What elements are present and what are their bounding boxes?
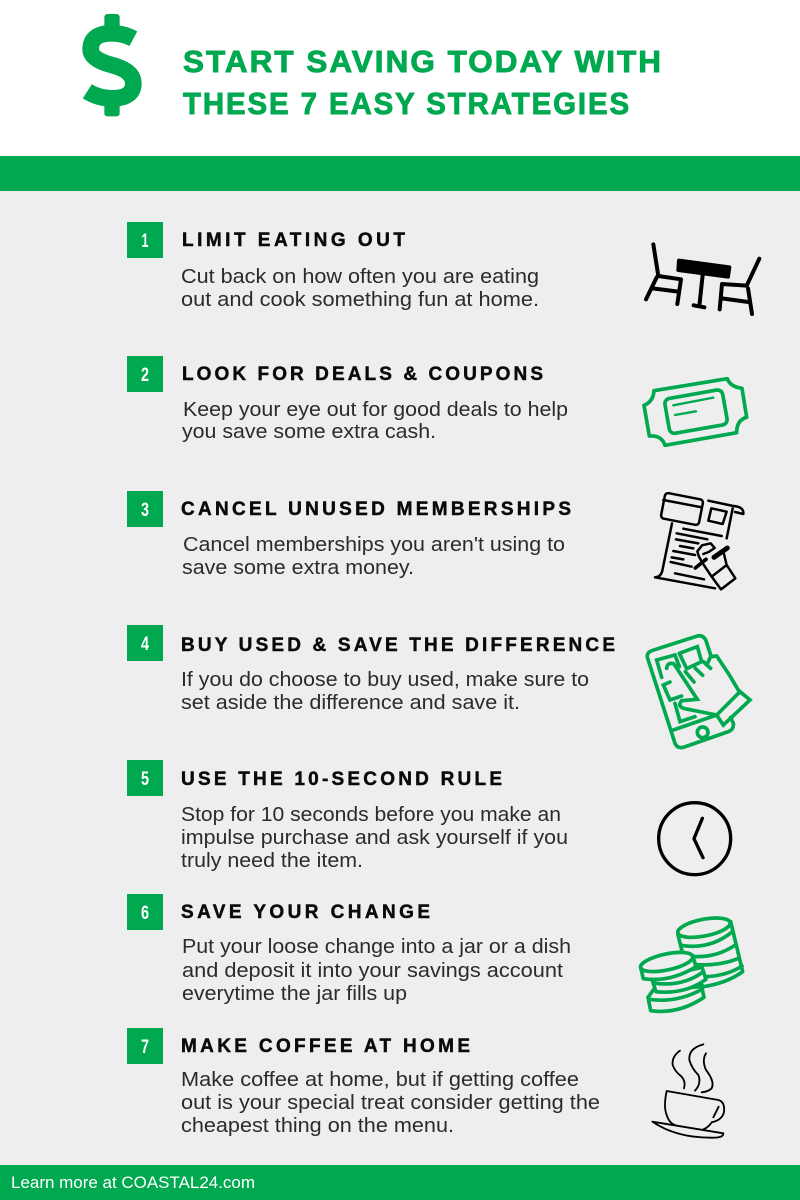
strategy 4 <box>127 625 615 714</box>
body 3 <box>182 534 565 579</box>
heading 3: CANCEL UNUSED MEMBERSHIPS <box>181 499 571 520</box>
number badge 1: 1 <box>142 231 149 252</box>
footer: Learn more at COASTAL24.com <box>11 1173 255 1192</box>
body 6: Put your loose change into a jar or a dish <box>182 936 571 958</box>
body 1 <box>181 266 539 311</box>
body 6 <box>182 936 571 1005</box>
number badge 5: 5 <box>141 769 149 790</box>
body 2: Keep your eye out for good deals to help <box>183 399 568 421</box>
title: START SAVING TODAY WITH <box>183 44 663 79</box>
header band <box>0 156 800 191</box>
body 6: and deposit it into your savings account <box>182 960 563 982</box>
body 4: If you do choose to buy used, make sure to <box>181 669 589 691</box>
body 5 <box>181 804 568 872</box>
strategy 5 <box>127 760 568 872</box>
body 4: set aside the difference and save it. <box>181 692 520 714</box>
number badge 3 <box>127 491 163 527</box>
strategy 7 <box>127 1028 600 1137</box>
number badge 4: 4 <box>141 634 149 655</box>
number badge 1 <box>127 222 163 258</box>
body 7: Make coffee at home, but if getting coffee <box>181 1069 579 1091</box>
body 5: impulse purchase and ask yourself if you <box>181 827 568 849</box>
body 3: save some extra money. <box>182 557 414 579</box>
heading 2: LOOK FOR DEALS & COUPONS <box>182 364 543 385</box>
icon: table and chairs <box>646 244 759 314</box>
body 3: Cancel memberships you aren't using to <box>183 534 565 556</box>
number badge 2 <box>127 356 163 392</box>
body 7 <box>181 1069 600 1137</box>
title <box>183 44 663 121</box>
icon: dollar sign <box>87 14 133 116</box>
body 1: out and cook something fun at home. <box>181 289 539 311</box>
footer <box>0 1165 800 1200</box>
strategy 1 <box>127 222 539 311</box>
strategy 3 <box>127 491 571 579</box>
heading 1: LIMIT EATING OUT <box>182 230 405 251</box>
icon: clock <box>659 803 731 875</box>
number badge 5 <box>127 760 163 796</box>
number badge 6: 6 <box>141 903 149 924</box>
body 5: truly need the item. <box>181 850 363 872</box>
body 7: cheapest thing on the menu. <box>181 1115 454 1137</box>
icon: coffee cup <box>652 1044 724 1138</box>
heading 7: MAKE COFFEE AT HOME <box>181 1036 470 1057</box>
body 4 <box>181 669 589 714</box>
number badge 7: 7 <box>141 1037 149 1058</box>
icon: coin stacks <box>639 914 743 1011</box>
body 7: out is your special treat consider getting the <box>181 1092 600 1114</box>
title: THESE 7 EASY STRATEGIES <box>183 86 631 121</box>
body 1: Cut back on how often you are eating <box>181 266 539 288</box>
icon: phone with hand <box>647 636 750 748</box>
heading 4: BUY USED & SAVE THE DIFFERENCE <box>181 635 615 656</box>
heading 5: USE THE 10-SECOND RULE <box>181 769 502 790</box>
body 2: you save some extra cash. <box>182 421 436 443</box>
strategy 6 <box>127 894 571 1005</box>
icon: document being signed <box>655 493 743 589</box>
icon: coupon ticket <box>644 379 747 445</box>
strategy 2 <box>127 356 568 443</box>
number badge 3: 3 <box>141 500 149 521</box>
heading 6: SAVE YOUR CHANGE <box>181 902 430 923</box>
number badge 6 <box>127 894 163 930</box>
number badge 7 <box>127 1028 163 1064</box>
body 6: everytime the jar fills up <box>182 983 407 1005</box>
body 5: Stop for 10 seconds before you make an <box>181 804 561 826</box>
body 2 <box>182 399 568 443</box>
number badge 4 <box>127 625 163 661</box>
number badge 2: 2 <box>141 365 149 386</box>
